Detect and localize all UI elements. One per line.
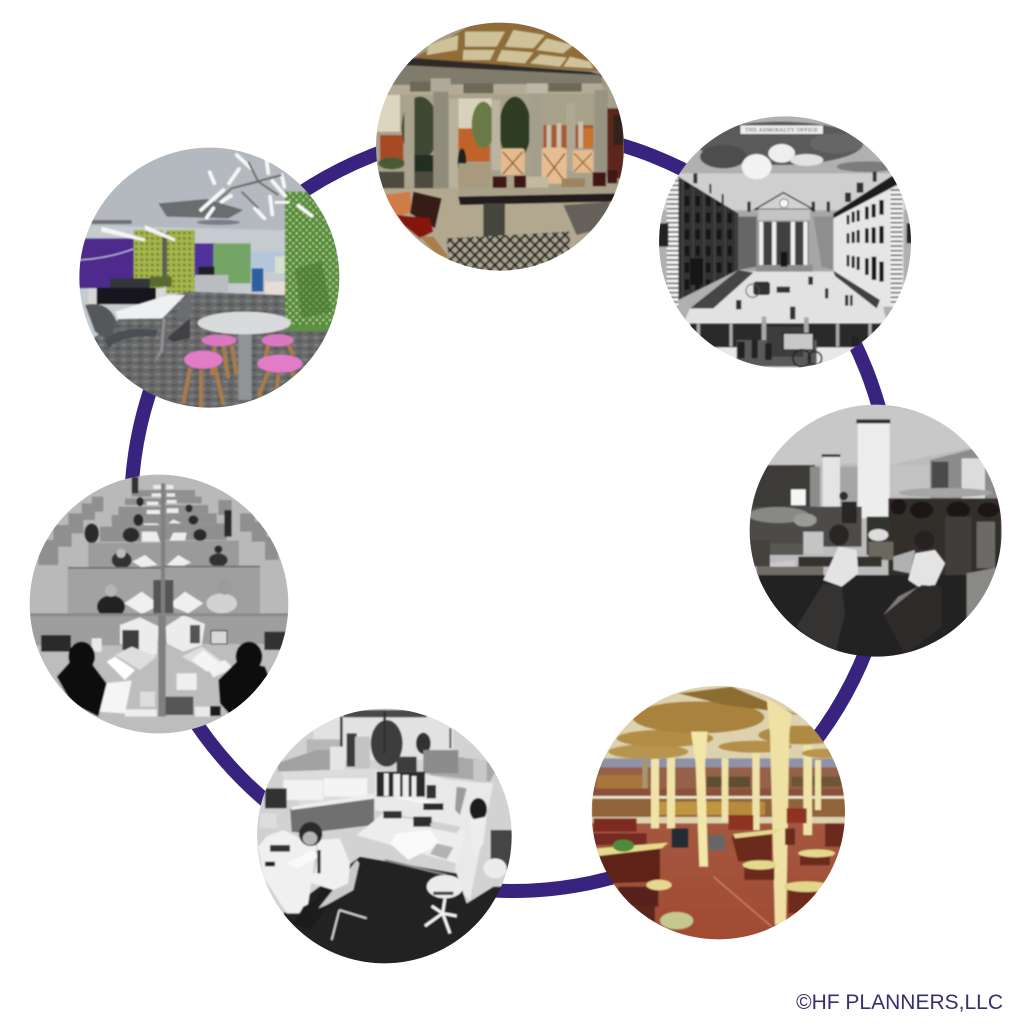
photo: Admiralty courtyard engraving [659, 116, 911, 368]
near left worker [57, 642, 107, 717]
near right worker [218, 642, 272, 717]
timeline ring [131, 129, 893, 891]
left desk [257, 788, 318, 913]
near desks base [25, 614, 295, 740]
dark floor [283, 857, 517, 967]
pink stools [183, 334, 303, 408]
partitions [277, 747, 500, 833]
column capitals [608, 687, 848, 759]
counter and floor [384, 186, 616, 271]
chandelier [201, 155, 312, 218]
clouds [697, 122, 897, 179]
visitor at right [470, 798, 514, 878]
ceiling lights [101, 225, 175, 242]
round table [198, 312, 291, 400]
desks rear [110, 267, 285, 300]
centre divider [158, 483, 166, 717]
courtyard with carriage and figures [683, 270, 887, 323]
mushroom columns [642, 745, 821, 835]
desks and papers [750, 517, 893, 577]
green screens [134, 230, 251, 293]
desks [593, 808, 845, 929]
columns [810, 419, 890, 518]
photo: Johnson Wax great workroom [585, 680, 852, 947]
photo: Roman forum colonnade [370, 15, 630, 275]
red and orange chair [383, 192, 450, 258]
columns [404, 78, 608, 198]
carpet [585, 823, 852, 947]
banner: THE ADMIRALTY OFFICE [745, 128, 818, 134]
second row [88, 541, 239, 568]
near monitors and keyboards [41, 615, 286, 680]
seated woman left [797, 524, 858, 653]
drafting desk [357, 811, 467, 875]
man seated at desk [293, 822, 367, 940]
shelving [375, 770, 493, 900]
coffered ceiling [413, 22, 600, 72]
banner [740, 125, 823, 134]
carpet [75, 292, 345, 415]
near papers [98, 660, 233, 717]
central portico [693, 172, 877, 272]
seated woman right [883, 531, 945, 655]
crowd of clerks [748, 488, 1002, 580]
purple wall [78, 238, 287, 292]
right wing [833, 175, 917, 307]
photo: 1960s action office [257, 708, 512, 964]
copyright credit: ©HF PLANNERS,LLC [796, 991, 1003, 1014]
far rows of cubicles [38, 490, 278, 565]
ceiling [75, 145, 345, 232]
storage jars and goods [458, 148, 617, 191]
photo: 1990s cubicle farm [25, 470, 295, 740]
background courtyard [377, 93, 610, 190]
front wall and coach [688, 316, 882, 368]
rear wall [752, 448, 1002, 510]
perforated green panel [285, 192, 342, 331]
main columns [691, 698, 792, 925]
rear office and plants [307, 710, 453, 772]
photo: modern open office [75, 145, 345, 415]
distant workers [84, 497, 232, 543]
photo: early clerical office [750, 404, 1002, 657]
mezzanine [592, 758, 848, 817]
stool [425, 875, 463, 933]
workstation [85, 288, 192, 363]
left wing [658, 177, 738, 307]
third row [68, 566, 260, 618]
ceiling [765, 403, 975, 465]
